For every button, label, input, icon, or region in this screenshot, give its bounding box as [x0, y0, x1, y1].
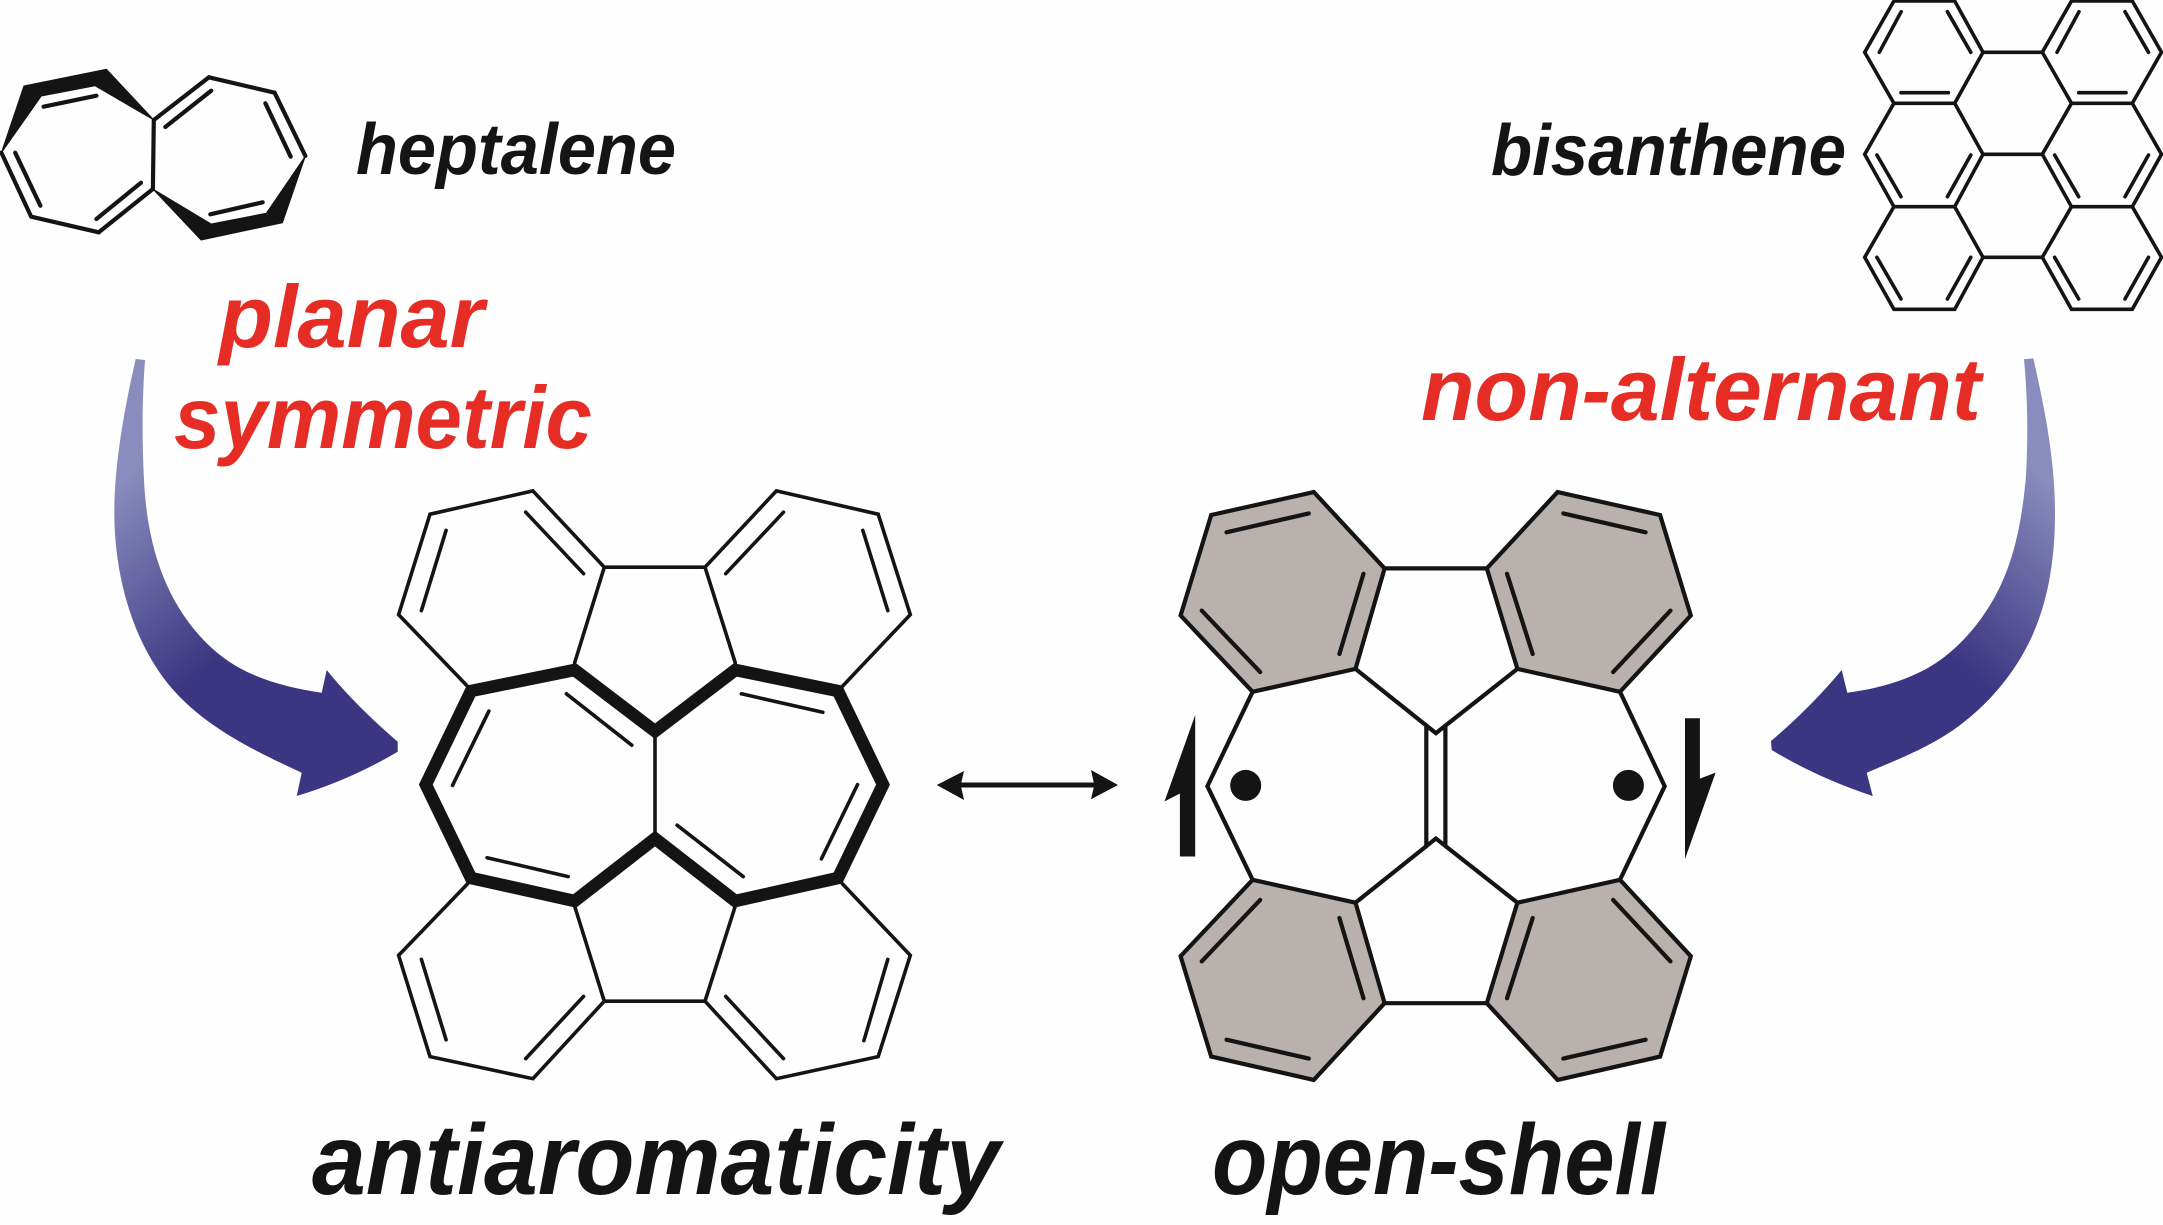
- highlighted antiaromatic perimeter: [426, 670, 883, 901]
- label: symmetric: symmetric: [174, 368, 592, 467]
- molecule: heptalene: [1, 69, 305, 240]
- molecule: bisanthene: [1865, 1, 2162, 309]
- molecule: open-shell structure: [1164, 492, 1716, 1080]
- arrow: resonance double arrow: [937, 770, 1118, 800]
- spin arrow up: [1164, 715, 1195, 856]
- label: planar: planar: [217, 267, 489, 366]
- radical dot right: [1613, 770, 1644, 801]
- arrow: left curved blue: [114, 359, 398, 796]
- label: bisanthene: bisanthene: [1491, 111, 1846, 191]
- label: heptalene: heptalene: [356, 110, 676, 190]
- label: antiaromaticity: antiaromaticity: [312, 1104, 1004, 1216]
- shaded benzene rings: [1181, 492, 1691, 1080]
- label: open-shell: open-shell: [1212, 1104, 1667, 1216]
- radical dot left: [1230, 770, 1261, 801]
- label: non-alternant: non-alternant: [1421, 340, 1985, 439]
- arrow: right curved blue: [1771, 358, 2055, 796]
- spin arrow down: [1685, 718, 1716, 859]
- molecule: antiaromatic structure: [399, 491, 910, 1079]
